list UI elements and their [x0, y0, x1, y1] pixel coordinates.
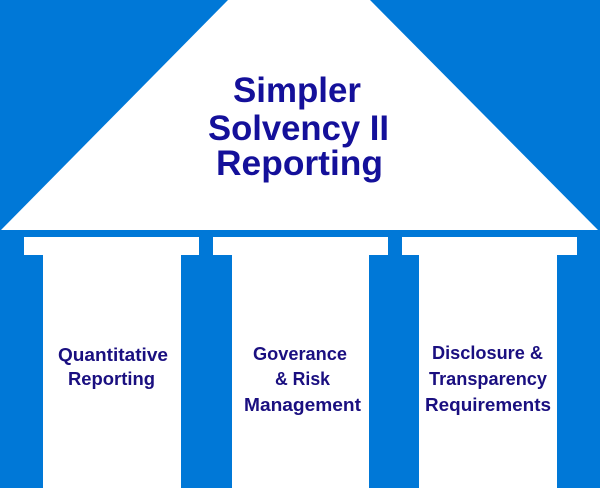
pillar label	[244, 343, 361, 415]
pillar label	[58, 344, 168, 389]
pillar: disclosure and transparency requirements	[402, 237, 577, 488]
title: Simpler	[233, 71, 361, 110]
pillar label: Requirements	[425, 394, 551, 415]
title	[208, 71, 389, 183]
pillar label: Transparency	[429, 368, 548, 389]
pillar label	[425, 342, 551, 415]
title: Reporting	[216, 144, 383, 183]
pillar: governance and risk management	[213, 237, 388, 488]
roof with title	[1, 0, 598, 230]
pillar label: Disclosure &	[432, 342, 543, 363]
pillar: quantitative reporting	[24, 237, 199, 488]
pillar label: Reporting	[68, 368, 155, 389]
pillar label: Goverance	[253, 343, 347, 364]
title: Solvency II	[208, 109, 389, 148]
pillar label: & Risk	[275, 368, 331, 389]
pillar label: Quantitative	[58, 344, 168, 365]
pillar label: Management	[244, 394, 361, 415]
